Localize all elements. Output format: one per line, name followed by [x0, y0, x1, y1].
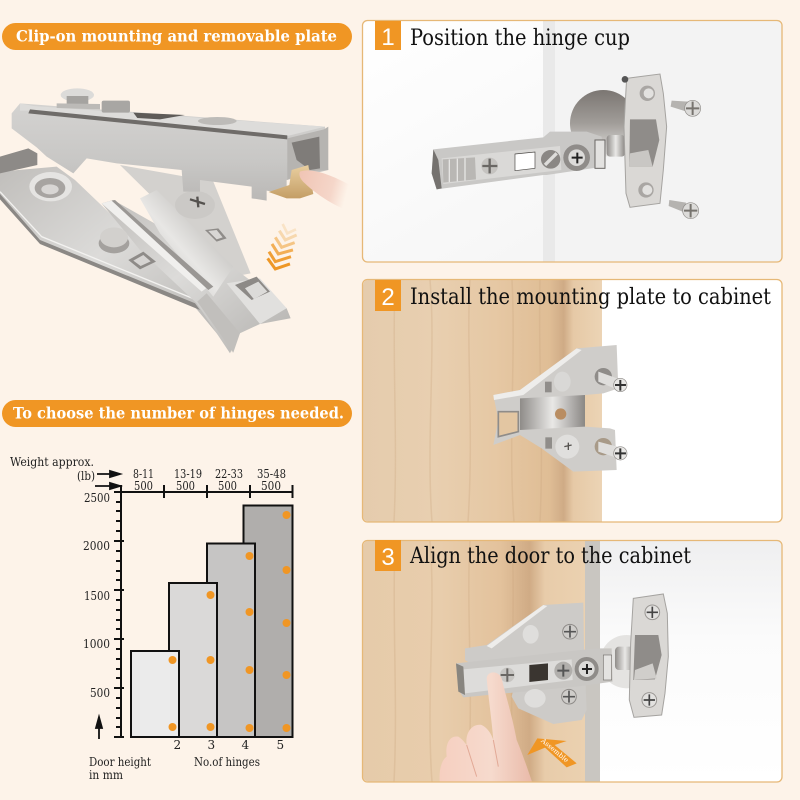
heading: choose number of hinges [2, 400, 352, 427]
heading: choose number of hinges: To choose the number of hinges needed. [13, 404, 344, 422]
axis title: weight: Weight approx. [10, 455, 94, 469]
hinge count labels: 2 [174, 738, 181, 752]
number badge 1 [375, 21, 401, 51]
arrow: weight row [97, 471, 120, 477]
bar: 4 hinges [207, 544, 255, 737]
plate countersink [29, 172, 72, 201]
panel: step 1 [362, 20, 782, 262]
mounting plate [493, 345, 627, 472]
heading: clip-on mounting [2, 23, 352, 50]
height labels: 500 [90, 686, 110, 700]
weight labels: 8-11 [133, 467, 154, 481]
arrow: up [96, 717, 102, 739]
panel: step 3 [362, 540, 782, 785]
weight labels: 35-48 [257, 467, 286, 481]
assembled hinge [440, 594, 668, 785]
screw: lower [669, 200, 699, 219]
bar: 3 hinges [169, 583, 217, 737]
hinge arm [102, 200, 291, 353]
title: step 3: Align the door to the cabinet [409, 544, 691, 569]
weight labels: 500 [176, 479, 195, 493]
axis title: door height: in mm [89, 768, 124, 782]
height labels: 2500 [84, 491, 110, 505]
arrow: assemble: Assemble [539, 736, 570, 764]
number badge 2 [375, 280, 401, 311]
hinge count labels [174, 738, 284, 752]
main bar [12, 103, 328, 201]
rear triangular plate [120, 165, 251, 277]
height labels: 1500 [84, 589, 110, 603]
bar: 5 hinges [244, 506, 292, 737]
heading: clip-on mounting: Clip-on mounting and removable plate [16, 26, 337, 46]
hinge count labels: 3 [208, 738, 215, 752]
number badge 3 [375, 540, 401, 571]
height labels [83, 491, 110, 700]
wood grain [394, 541, 471, 782]
wood grain [394, 280, 541, 522]
lower plate [0, 167, 233, 353]
axis lines and ticks [114, 485, 293, 738]
weight labels: 22-33 [215, 467, 243, 481]
number badge 3: 3 [381, 544, 395, 571]
hinge position dots [168, 511, 290, 732]
height labels: 2000 [83, 539, 110, 553]
hinge count labels: 4 [242, 738, 250, 752]
bar: 2 hinges [131, 651, 179, 737]
hinge count labels: 5 [276, 738, 284, 752]
finger [299, 170, 351, 209]
axis title: door height: Door height [89, 755, 151, 769]
top screws [61, 88, 94, 102]
height labels: 1000 [83, 637, 110, 651]
axis unit: lb: (lb) [77, 469, 95, 483]
weight labels: 500 [261, 479, 281, 493]
arrow: height row [95, 483, 120, 489]
number badge 2: 2 [381, 284, 395, 311]
axis title: number of hinges: No.of hinges [194, 755, 260, 769]
hinge: step 1 [432, 74, 701, 219]
weight labels: 500 [134, 479, 153, 493]
screw: upper [671, 100, 701, 116]
left fixing [0, 148, 37, 173]
weight labels: 500 [218, 479, 237, 493]
illustration: clip-on hinge with finger [0, 88, 351, 353]
rivet [99, 233, 129, 253]
brass release tab [269, 165, 313, 198]
pivot screw [175, 191, 215, 219]
weight labels: 13-19 [174, 467, 202, 481]
weight labels [133, 467, 286, 493]
arrow: assemble [527, 736, 577, 767]
number badge 1: 1 [381, 24, 395, 51]
bar end opening [287, 127, 328, 180]
chart: hinges by door height and weight [10, 455, 293, 782]
title: step 1: Position the hinge cup [410, 26, 630, 51]
hand [440, 672, 533, 785]
panel: step 2 [362, 280, 782, 522]
chevrons [283, 224, 296, 233]
